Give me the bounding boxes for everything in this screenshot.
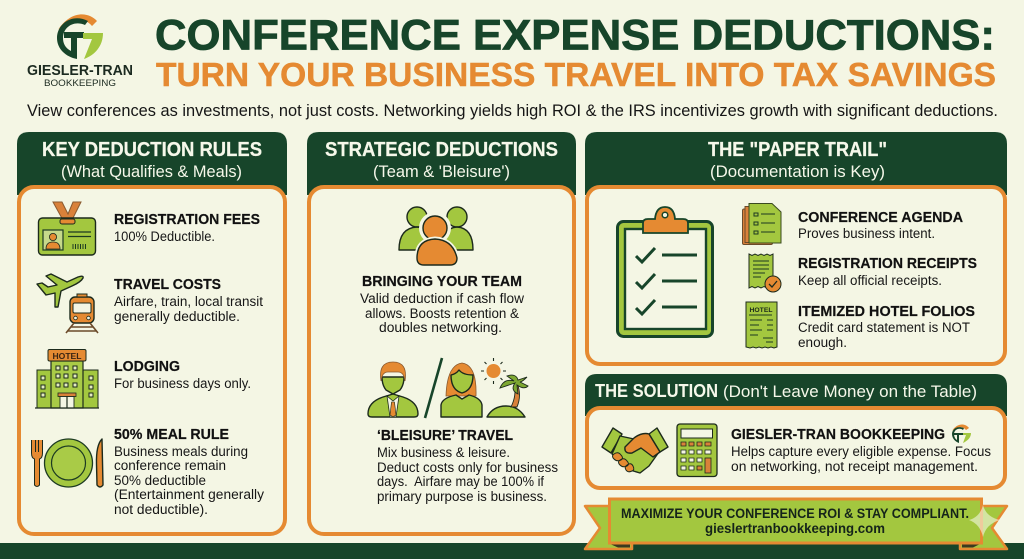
text: bleisure travel: days. Airfare may be 100% if [377, 474, 544, 489]
text: travel costs [114, 277, 263, 324]
text: travel costs: Airfare, train, local transit [114, 294, 263, 309]
text: travel costs: generally deductible. [114, 309, 240, 324]
text: lodging [114, 359, 251, 391]
text: travel costs: TRAVEL COSTS [114, 277, 221, 293]
icon: hotel: HOTEL [52, 351, 82, 361]
text: 50% meal rule: (Entertainment generally [114, 487, 264, 502]
text: 50% meal rule [114, 427, 264, 517]
text: bringing your team: BRINGING YOUR TEAM [362, 274, 522, 290]
text: bringing your team: doubles networking. [379, 320, 502, 335]
text: registration fees [114, 212, 260, 244]
text: bringing your team: Valid deduction if cash flow [360, 291, 524, 306]
text: giesler-tran bookkeeping: GIESLER-TRAN BOOKKEEPING [731, 427, 945, 443]
text: itemized hotel folios: enough. [798, 335, 847, 350]
title: CONFERENCE EXPENSE DEDUCTIONS: [155, 12, 995, 60]
icon: plane and train [37, 274, 98, 333]
heading: the solution: THE SOLUTION [595, 381, 718, 401]
intro text: View conferences as investments, not just costs. Networking yields high ROI & the IRS incentivizes growth with significant deductions. [27, 102, 998, 120]
icon: team [399, 207, 473, 265]
icon: agenda documents [742, 204, 781, 244]
text: bleisure travel: Deduct costs only for business [377, 460, 558, 475]
text: registration receipts [798, 256, 977, 288]
text: itemized hotel folios: Credit card statement is NOT [798, 320, 970, 335]
heading: strategic deductions [325, 139, 558, 181]
icon: calculator [677, 424, 717, 476]
text: conference agenda: CONFERENCE AGENDA [798, 210, 964, 226]
icon: hotel folio [746, 302, 777, 348]
text: bleisure travel: ‘BLEISURE’ TRAVEL [377, 428, 513, 444]
text: 50% meal rule: 50% deductible [114, 473, 206, 488]
icon: id badge [38, 202, 96, 255]
heading: strategic deductions: STRATEGIC DEDUCTIONS [325, 139, 558, 161]
text: registration fees: 100% Deductible. [114, 229, 215, 244]
icon: handshake [602, 428, 668, 473]
text: bleisure travel: primary purpose is business. [377, 489, 547, 504]
text: 50% meal rule: not deductible). [114, 502, 208, 517]
heading: key deduction rules: KEY DEDUCTION RULES [42, 139, 262, 161]
text: bleisure travel [377, 428, 558, 504]
panel: the solution [585, 374, 1007, 488]
icon: clipboard checklist [618, 207, 712, 336]
text: registration receipts: Keep all official receipts. [798, 273, 942, 288]
text: registration receipts: REGISTRATION RECEIPTS [798, 256, 977, 272]
sparkle [969, 505, 1000, 537]
panel: paper trail [585, 132, 1007, 364]
heading: paper trail [708, 139, 887, 181]
banner [585, 499, 1007, 549]
icon: small logo [952, 425, 971, 443]
text: giesler-tran bookkeeping: Helps capture every eligible expense. Focus [731, 444, 991, 459]
heading: the solution [595, 381, 977, 401]
text: 50% meal rule: 50% MEAL RULE [114, 427, 229, 443]
title [155, 12, 996, 93]
banner text: gieslertranbookkeeping.com [705, 521, 885, 536]
heading: the solution: (Don't Leave Money on the Table) [723, 382, 977, 401]
text: giesler-tran bookkeeping [731, 427, 991, 474]
logo: GIESLER-TRAN [27, 63, 133, 79]
icon: receipt with check [749, 254, 781, 292]
icon: hotel folio: HOTEL [750, 307, 773, 314]
text: itemized hotel folios: ITEMIZED HOTEL FOLIOS [798, 304, 975, 320]
text: itemized hotel folios [798, 304, 975, 350]
text: lodging: For business days only. [114, 376, 251, 391]
text: 50% meal rule: conference remain [114, 458, 226, 473]
text: lodging: LODGING [114, 359, 180, 375]
text: registration fees: REGISTRATION FEES [114, 212, 260, 228]
icon: hotel [35, 350, 99, 408]
heading: paper trail: (Documentation is Key) [710, 162, 885, 181]
text: 50% meal rule: Business meals during [114, 444, 248, 459]
panel: key deduction rules [17, 132, 287, 534]
title: TURN YOUR BUSINESS TRAVEL INTO TAX SAVINGS [156, 56, 996, 93]
text: bringing your team [360, 274, 524, 335]
icon: plate and cutlery [32, 439, 103, 487]
text: giesler-tran bookkeeping: on networking, not receipt management. [731, 459, 978, 474]
logo [27, 14, 133, 89]
panel: strategic deductions [307, 132, 576, 534]
text: bringing your team: allows. Boosts retention & [365, 306, 519, 321]
icon: business people and beach [368, 358, 528, 418]
text: conference agenda: Proves business intent. [798, 226, 935, 241]
text: bleisure travel: Mix business & leisure. [377, 445, 510, 460]
logo: BOOKKEEPING [44, 78, 116, 89]
text: conference agenda [798, 210, 964, 241]
heading: strategic deductions: (Team & 'Bleisure') [373, 162, 510, 181]
heading: key deduction rules: (What Qualifies & Meals) [61, 162, 242, 181]
banner text: MAXIMIZE YOUR CONFERENCE ROI & STAY COMPLIANT. [621, 506, 969, 521]
banner text [621, 506, 969, 536]
heading: paper trail: THE "PAPER TRAIL" [708, 139, 887, 161]
heading: key deduction rules [42, 139, 262, 181]
